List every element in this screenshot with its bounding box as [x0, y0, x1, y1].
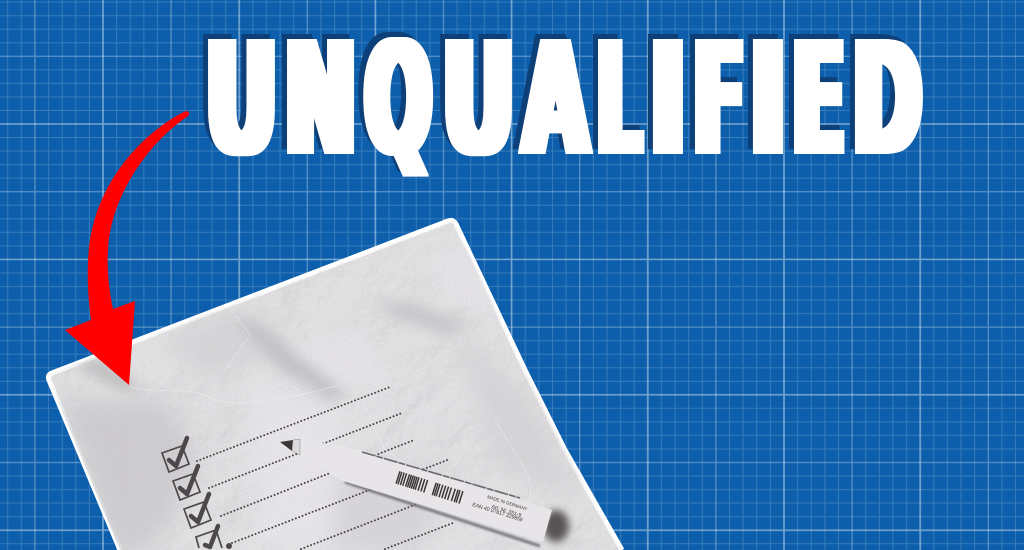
checkbox 1	[162, 438, 189, 472]
pen label text: Art. Nr. 351-9	[491, 504, 522, 519]
checkbox 3	[184, 494, 211, 528]
checkboxes with check marks	[162, 438, 232, 549]
dotted answer lines	[197, 387, 453, 549]
title: U	[443, 9, 514, 190]
pen label text	[471, 491, 528, 524]
panel: crumpled checklist paper	[40, 215, 630, 550]
title: D	[854, 9, 921, 190]
title: Q	[366, 9, 431, 190]
checkbox 2	[173, 466, 200, 500]
title: I	[750, 9, 786, 190]
arrow: red curved arrow pointing to paper	[65, 111, 189, 385]
title: A	[524, 9, 588, 190]
icon: marker pen	[280, 439, 569, 546]
title: E	[793, 9, 844, 190]
checkbox 4	[196, 526, 232, 549]
title: U	[206, 9, 277, 190]
title: L	[598, 9, 640, 190]
title: I	[650, 9, 686, 190]
title: F	[694, 9, 744, 190]
title	[206, 9, 921, 190]
pen label text: EAN 40 07817 329859	[471, 502, 523, 524]
pen label text: MADE IN GERMANY	[487, 494, 528, 512]
barcode	[396, 471, 463, 504]
title: N	[285, 9, 356, 190]
